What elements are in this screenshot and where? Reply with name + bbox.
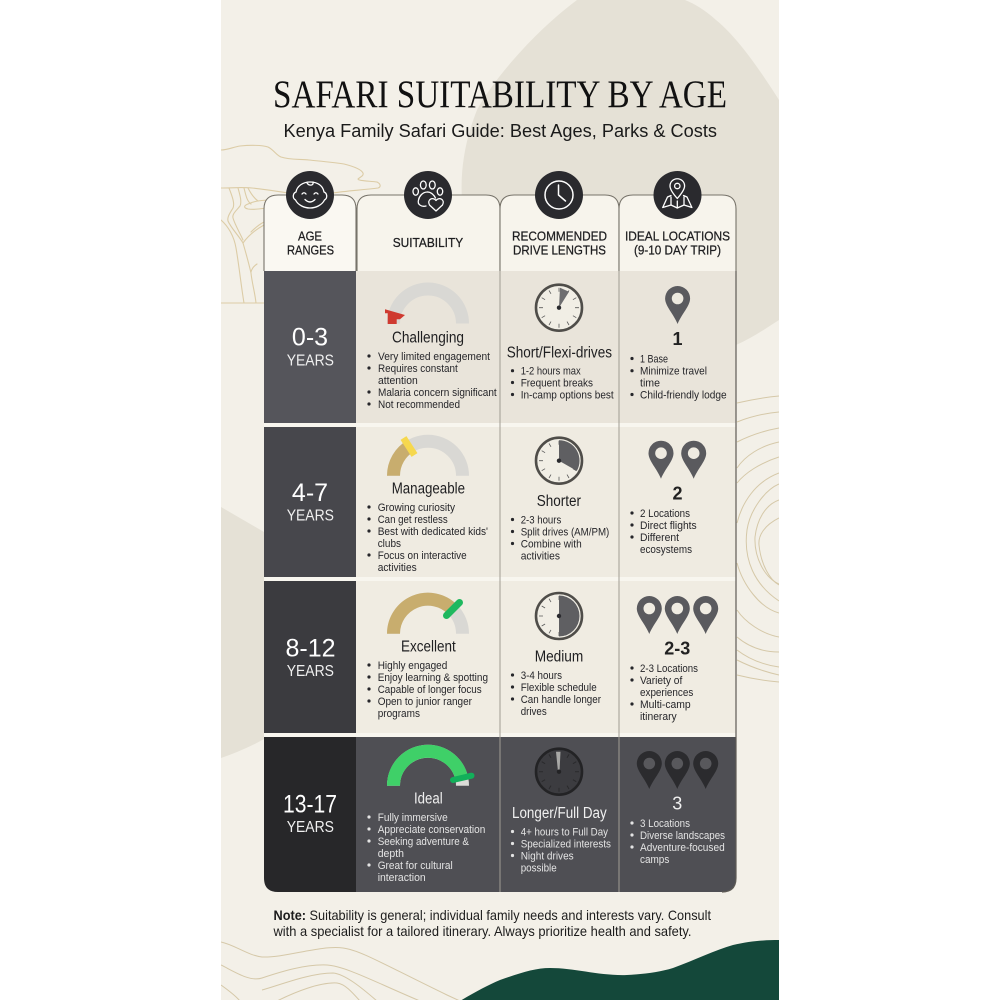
suitability text: excellent (367, 638, 488, 720)
drive text: medium: drives (521, 706, 547, 718)
age label: 8-12 years: 8-12 (285, 634, 336, 662)
drive text: medium: Medium (535, 648, 583, 666)
suitability text: ideal: Appreciate conservation (378, 824, 485, 836)
table rows (264, 271, 736, 892)
suitability text: manageable (367, 480, 488, 574)
location pins: three (637, 596, 718, 634)
header labels: AGE (298, 230, 322, 244)
suitability text: ideal: Great for cultural (378, 860, 453, 872)
suitability text: manageable: Best with dedicated kids' (378, 526, 488, 538)
location text: three: 3 (672, 794, 682, 814)
header labels: IDEAL LOCATIONS (625, 230, 730, 244)
background panel (221, 0, 779, 1000)
suitability text: excellent: Excellent (401, 638, 456, 656)
location text: three (630, 794, 725, 866)
location pins: dark three (637, 751, 718, 789)
suitability text: challenging: attention (378, 375, 418, 387)
location text: two to three (630, 638, 698, 723)
location text: two to three: Variety of (640, 675, 683, 687)
age label: 4-7 years: 4-7 (292, 479, 328, 507)
icon: acacia tree line art (221, 145, 380, 303)
age label: 13-17 years (283, 790, 337, 836)
green wave footer (460, 940, 779, 1000)
location text: one: 1 (672, 329, 683, 349)
header labels: RECOMMENDED (512, 230, 607, 244)
drive text: medium: Can handle longer (521, 694, 601, 706)
age label: 4-7 years: YEARS (287, 508, 334, 524)
suitability text: manageable: Manageable (392, 480, 465, 498)
suitability text: challenging (367, 330, 497, 411)
location text: one: time (640, 378, 660, 390)
suitability text: excellent: Capable of longer focus (378, 684, 482, 696)
suitability text: challenging: Malaria concern significant (378, 387, 497, 399)
location text: two to three: 2-3 (664, 638, 690, 658)
age label: 8-12 years (285, 634, 336, 680)
suitability gauge: challenging (385, 289, 462, 324)
suitability text: manageable: activities (378, 562, 417, 574)
location text: two: 2 Locations (640, 508, 690, 520)
drive text: full day: 4+ hours to Full Day (521, 826, 608, 838)
location text: one (630, 329, 727, 402)
drive text: shorter: 2-3 hours (521, 514, 562, 526)
suitability text: manageable: clubs (378, 538, 401, 550)
location text: two to three: Multi-camp (640, 699, 691, 711)
footnote: Note: Suitability is general; individual family needs and interests vary. Consult (274, 907, 711, 923)
suitability text: challenging: Not recommended (378, 399, 460, 411)
location pins: two (648, 441, 706, 479)
age label: 4-7 years (287, 479, 334, 524)
location text: one: Minimize travel (640, 366, 707, 378)
location text: two: Direct flights (640, 520, 697, 532)
suitability text: challenging: Challenging (392, 330, 464, 346)
location text: two to three: experiences (640, 687, 694, 699)
drive text: short: Frequent breaks (521, 378, 593, 390)
location text: three: camps (640, 854, 670, 866)
location text: three: 3 Locations (640, 818, 690, 830)
suitability text: ideal: interaction (378, 872, 426, 884)
drive text: short: In-camp options best (521, 390, 614, 402)
contour lines bottom left (221, 942, 460, 1000)
suitability gauge: ideal (394, 751, 472, 786)
drive text: shorter: activities (521, 550, 560, 562)
header labels (287, 230, 730, 258)
drive text: full day: Specialized interests (521, 838, 611, 850)
location text: two: ecosystems (640, 544, 692, 556)
suitability text: excellent: programs (378, 708, 420, 720)
location text: two: 2 (672, 484, 683, 504)
suitability text: manageable: Can get restless (378, 514, 448, 526)
location text: one: Child-friendly lodge (640, 390, 727, 402)
suitability text: ideal: Fully immersive (378, 812, 448, 824)
table header tabs (264, 195, 736, 271)
suitability gauge: manageable (394, 438, 462, 476)
suitability text: challenging: Very limited engagement (378, 351, 491, 363)
drive clock: short (536, 285, 582, 331)
icon: paw with heart (404, 171, 452, 219)
suitability text: ideal: Seeking adventure & (378, 836, 469, 848)
suitability text: ideal: depth (378, 848, 404, 860)
age label: 13-17 years: YEARS (287, 819, 334, 836)
drive text: medium: Flexible schedule (521, 682, 597, 694)
suitability text: manageable: Growing curiosity (378, 502, 455, 514)
age label: 0-3 years: YEARS (287, 352, 334, 370)
location text: three: Adventure-focused (640, 842, 725, 854)
drive text: shorter (511, 493, 610, 562)
age label: 13-17 years: 13-17 (283, 790, 337, 818)
contour lines right (737, 396, 779, 682)
header labels: SUITABILITY (393, 236, 464, 250)
suitability text: ideal (367, 790, 485, 884)
age label: 8-12 years: YEARS (287, 663, 334, 680)
drive text: medium (511, 648, 601, 718)
drive text: short: Short/Flexi-drives (507, 344, 612, 362)
location text: two to three: 2-3 Locations (640, 663, 698, 675)
drive text: full day: Night drives (521, 850, 574, 862)
suitability gauge: excellent (394, 599, 462, 634)
header labels: DRIVE LENGTHS (513, 244, 606, 258)
location pin: one (665, 286, 690, 324)
location text: two to three: itinerary (640, 711, 677, 723)
drive text: full day: possible (521, 862, 557, 874)
location text: three: Diverse landscapes (640, 830, 725, 842)
icon: map pin (654, 171, 702, 219)
drive text: short: 1-2 hours max (521, 366, 581, 378)
drive text: shorter: Split drives (AM/PM) (521, 526, 610, 538)
footnote: with a specialist for a tailored itinerary. Always prioritize health and safety. (273, 923, 692, 939)
location text: two (630, 484, 697, 556)
drive clock: full day (536, 749, 582, 795)
icon: clock (535, 171, 583, 219)
drive text: short (507, 344, 614, 402)
drive text: shorter: Shorter (537, 493, 581, 510)
footnote (273, 907, 711, 939)
drive text: shorter: Combine with (521, 538, 582, 550)
drive text: full day: Longer/Full Day (512, 805, 607, 822)
icon: baby face (286, 171, 334, 219)
drive text: medium: 3-4 hours (521, 670, 562, 682)
suitability text: challenging: Requires constant (378, 363, 458, 375)
header labels: (9-10 DAY TRIP) (634, 244, 721, 258)
age label: 0-3 years: 0-3 (292, 324, 328, 352)
drive clock: medium (536, 593, 582, 639)
location text: two: Different (640, 532, 680, 544)
suitability text: manageable: Focus on interactive (378, 550, 467, 562)
subtitle: Kenya Family Safari Guide: Best Ages, Parks & Costs (284, 121, 717, 141)
title: SAFARI SUITABILITY BY AGE (273, 73, 727, 116)
header labels: RANGES (287, 244, 334, 258)
drive clock: shorter (536, 438, 582, 484)
suitability text: excellent: Enjoy learning & spotting (378, 672, 488, 684)
location text: one: 1 Base (640, 354, 668, 366)
suitability text: excellent: Open to junior ranger (378, 696, 472, 708)
suitability text: excellent: Highly engaged (378, 660, 447, 672)
drive text: full day (511, 805, 611, 874)
suitability text: ideal: Ideal (414, 790, 443, 808)
age label: 0-3 years (287, 324, 334, 370)
